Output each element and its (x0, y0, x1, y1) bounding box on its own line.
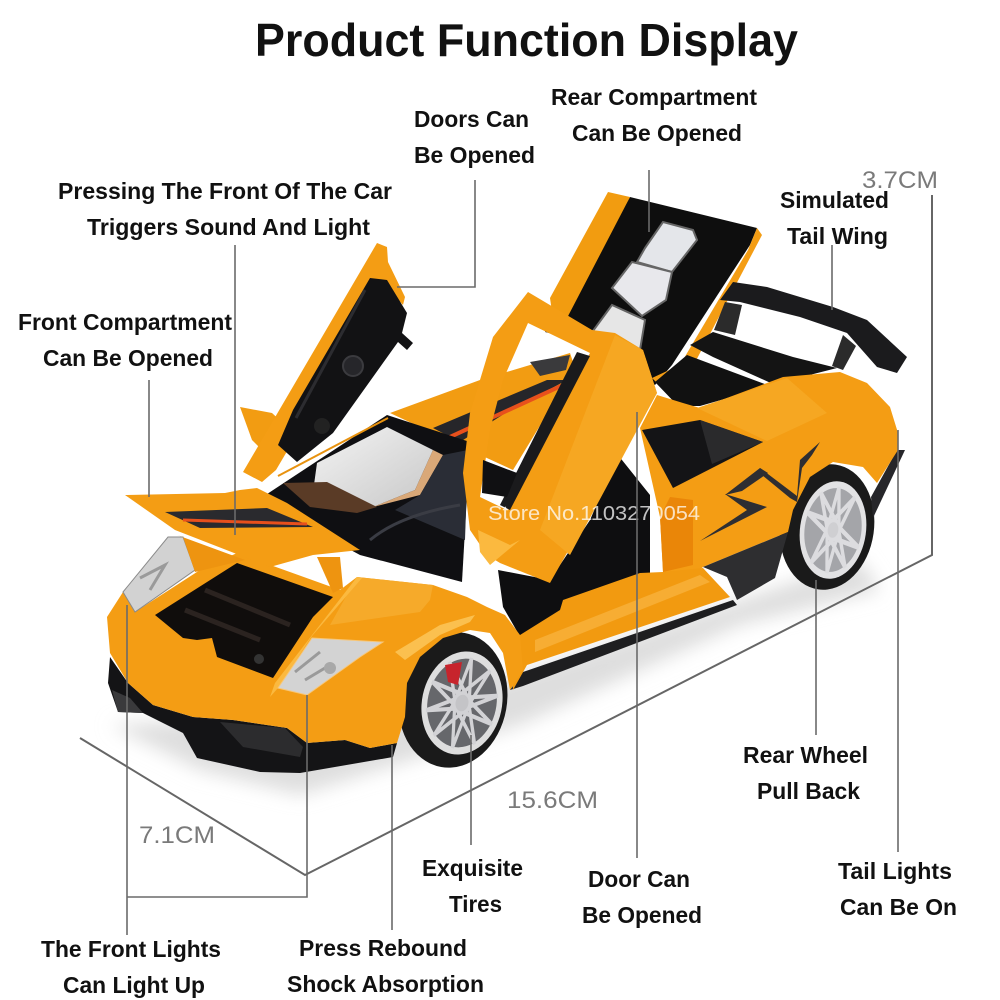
rear wheel (772, 458, 882, 596)
rear compartment lid (545, 192, 762, 386)
label: door can be opened: Be Opened (582, 902, 702, 928)
right headlight (278, 638, 383, 695)
label: front compartment (18, 309, 232, 371)
leader lines (127, 170, 898, 935)
label: front lights (41, 936, 221, 998)
label: press rebound: Shock Absorption (287, 971, 484, 997)
label: tail lights: Can Be On (840, 894, 957, 920)
driver door opened (240, 243, 413, 482)
front wheel (388, 624, 518, 776)
label: door can be opened (582, 866, 702, 928)
label: rear compartment: Rear Compartment (551, 84, 757, 110)
label: press rebound (287, 935, 484, 997)
dimension: length: 15.6CM (507, 787, 598, 814)
label: rear wheel pull back: Pull Back (757, 778, 861, 804)
front bumper (108, 657, 397, 773)
label: tail lights: Tail Lights (838, 858, 952, 884)
door opening interior (498, 455, 650, 640)
label: press rebound: Press Rebound (299, 935, 467, 961)
hood struts (317, 557, 343, 593)
label: doors can be opened: Be Opened (414, 142, 535, 168)
dimension: height: 3.7CM (862, 167, 938, 194)
dimension: width: 7.1CM (139, 822, 215, 849)
label: front lights: Can Light Up (63, 972, 205, 998)
label: simulated tail wing: Tail Wing (787, 223, 888, 249)
dimension lines (80, 195, 932, 875)
label: pressing front (58, 178, 392, 240)
floor shadow (110, 560, 880, 795)
windshield and interior (258, 415, 470, 582)
rear tail edge (871, 450, 905, 518)
roof with stripe (390, 353, 575, 470)
label: exquisite tires: Exquisite (422, 855, 523, 881)
label: exquisite tires (422, 855, 523, 917)
label: doors can be opened: Doors Can (414, 106, 529, 132)
front body (107, 553, 523, 748)
car illustration (107, 192, 907, 776)
hood inner wedge (177, 535, 245, 572)
label: exquisite tires: Tires (449, 891, 502, 917)
label: simulated tail wing (780, 187, 889, 249)
label: doors can be opened (414, 106, 535, 168)
passenger door opened (463, 292, 657, 583)
left headlight (123, 537, 195, 612)
sill (510, 568, 737, 690)
label: front lights: The Front Lights (41, 936, 221, 962)
side skirt (703, 532, 788, 600)
label: rear wheel pull back (743, 742, 868, 804)
tail wing (690, 282, 907, 384)
label: rear compartment (551, 84, 757, 146)
label: simulated tail wing: Simulated (780, 187, 889, 213)
title: Product Function Display (255, 14, 798, 66)
label: pressing front: Triggers Sound And Light (87, 214, 370, 240)
label: pressing front: Pressing The Front Of The Car (58, 178, 392, 204)
label: door can be opened: Door Can (588, 866, 690, 892)
watermark: Store No.1103270054 (488, 503, 700, 525)
rear body (640, 372, 898, 572)
label: rear wheel pull back: Rear Wheel (743, 742, 868, 768)
front compartment (155, 563, 333, 678)
label: front compartment: Can Be Opened (43, 345, 213, 371)
label: front compartment: Front Compartment (18, 309, 232, 335)
label: tail lights (838, 858, 957, 920)
front hood opened (125, 488, 360, 567)
engine bay (655, 355, 770, 406)
label: rear compartment: Can Be Opened (572, 120, 742, 146)
